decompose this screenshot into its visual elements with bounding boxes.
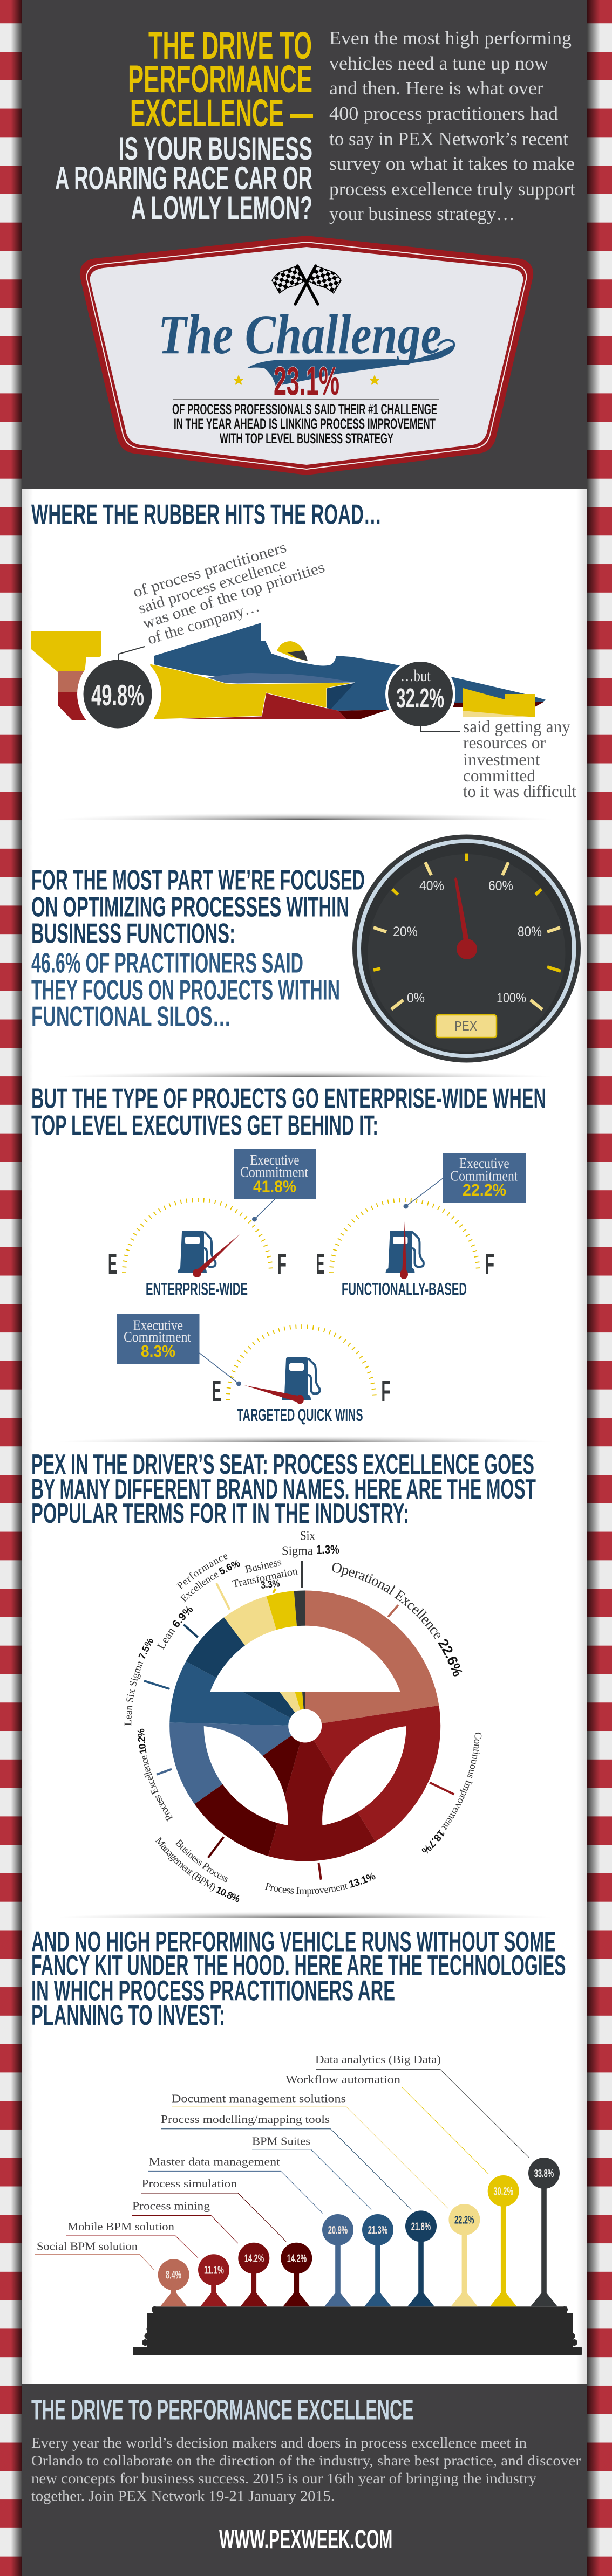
heading: projects go enterprise-wide	[31, 1083, 546, 1141]
helmet	[277, 641, 308, 661]
item: Process simulation 14.2%	[141, 2177, 312, 2306]
heading: no high performing vehicle	[31, 1926, 566, 2031]
item: Data analytics 33.8%: 33.8%	[534, 2168, 554, 2180]
item: BPM Suites 21.3%: 21.3%	[368, 2224, 387, 2237]
heading: focused on optimizing processes: ON OPTIMIZING PROCESSES WITHIN	[31, 892, 349, 923]
label: Six Sigma: Sigma	[282, 1544, 313, 1558]
label: Operational Excellence: Operational Excellence 22.6%	[332, 1563, 462, 1677]
heading: PEX in the driver's seat	[31, 1449, 536, 1529]
item: Process simulation 14.2%: Process simulation	[141, 2177, 237, 2190]
footer paragraph: together. Join PEX Network 19-21 January 2015.	[31, 2488, 335, 2504]
icon: right star	[369, 375, 380, 385]
label: Six Sigma	[282, 1529, 339, 1558]
title: PERFORMANCE	[128, 58, 312, 101]
item: Process modelling/mapping tools 21.8%	[161, 2113, 437, 2306]
callout: 8.3%: Executive	[133, 1317, 183, 1334]
challenge description: WITH TOP LEVEL BUSINESS STRATEGY	[220, 430, 393, 446]
text: 32.2% explanation: resources or	[463, 733, 546, 752]
challenge description: IN THE YEAR AHEAD IS LINKING PROCESS IMPROVEMENT	[174, 416, 436, 432]
gauge labels	[393, 878, 542, 1006]
item: Master data management 20.9%: 20.9%	[328, 2224, 348, 2237]
chart: technologies lollipop engine	[35, 2053, 582, 2355]
item: Mobile BPM solution 11.1%: Mobile BPM solution	[67, 2220, 175, 2233]
needle	[193, 1234, 240, 1277]
gauge needle	[454, 877, 477, 959]
label: Performance Excellence: Excellence 5.6%	[180, 1560, 240, 1603]
intro text: and then. Here is what over	[329, 78, 543, 99]
intro text: 400 process practitioners had	[329, 103, 559, 124]
item: Document management solutions 22.2%: Document management solutions	[172, 2092, 346, 2105]
chart: steering wheel pie	[124, 1529, 481, 1902]
challenge description: OF PROCESS PROFESSIONALS SAID THEIR #1 CHALLENGE	[172, 401, 437, 417]
side panel dark	[327, 683, 355, 709]
panel: The Challenge badge	[80, 236, 533, 475]
needle	[244, 1385, 304, 1404]
text: 32.2% explanation	[463, 717, 576, 801]
label: Business Process Management: Management (BPM) 10.8%	[155, 1837, 240, 1902]
icon: fuel pump	[385, 1231, 424, 1273]
item: BPM Suites 21.3%: BPM Suites	[252, 2134, 310, 2147]
chart: fuel gauge functionally-based: E	[316, 1248, 325, 1280]
intro text: Even the most high performing	[329, 28, 572, 49]
stat: 32.2% circle: 32.2%	[396, 683, 444, 713]
lower dark floor	[338, 710, 389, 719]
gauge labels: 20%	[393, 924, 418, 939]
label: Lean Six Sigma: Lean Six Sigma 7.5%	[124, 1638, 153, 1726]
title: A ROARING RACE CAR OR	[55, 160, 312, 196]
needle	[400, 1216, 408, 1279]
label: Business Transformation: Transformation	[232, 1565, 298, 1590]
item: Workflow automation 30.2%: Workflow automation	[285, 2073, 401, 2086]
text: rotated callout for 49.8%: was one of the top priorities	[140, 559, 327, 633]
chart: fuel gauge functionally-based	[316, 1153, 526, 1299]
item: BPM Suites 21.3%	[252, 2134, 393, 2306]
challenge description	[172, 399, 439, 446]
intro text	[329, 28, 575, 224]
callout: 41.8%: 41.8%	[253, 1177, 296, 1196]
chart: fuel gauge enterprise-wide: F	[277, 1248, 287, 1280]
intro text: survey on what it takes to make	[329, 153, 575, 174]
chart: fuel gauge targeted quick wins: F	[381, 1375, 391, 1407]
car body	[154, 623, 546, 711]
gauge labels: 60%	[488, 878, 513, 894]
title: IS YOUR BUSINESS	[119, 130, 312, 167]
callout: 8.3%	[117, 1314, 241, 1386]
panel: footer	[22, 2384, 587, 2576]
callout: 8.3%: Commitment	[124, 1329, 191, 1345]
side pod highlight	[207, 673, 355, 684]
item: Data analytics 33.8%	[315, 2053, 560, 2306]
callout: 41.8%	[234, 1149, 316, 1222]
label: Business Transformation: Business	[244, 1556, 283, 1576]
item: Workflow automation 30.2%: 30.2%	[493, 2185, 513, 2198]
front wing	[453, 688, 543, 717]
PEX plate: PEX	[454, 1019, 477, 1035]
text: 32.2% explanation: said getting any	[463, 717, 570, 736]
label: Process Excellence: Process Excellence 10.2%	[137, 1729, 173, 1822]
stat text: 46.6% of practitioners: 46.6% OF PRACTITIONERS SAID	[31, 948, 303, 979]
item: Process mining 14.2%	[132, 2200, 269, 2306]
label: TARGETED QUICK WINS	[237, 1405, 363, 1425]
intro text: process excellence truly support	[329, 178, 575, 200]
callout: 41.8%: Commitment	[240, 1164, 308, 1180]
item: Social BPM solution 8.4%	[35, 2240, 189, 2306]
icon: left star	[233, 375, 244, 385]
callout: 22.2%	[404, 1153, 526, 1209]
text: rotated callout for 49.8%: of the company…	[146, 597, 262, 648]
title: THE DRIVE TO	[148, 25, 312, 67]
label: Continuous Improvement: Continuous Improvement 18.7%	[422, 1732, 481, 1854]
stat: 32.2% circle: …but	[400, 666, 431, 685]
item: Document management solutions 22.2%: 22.2%	[454, 2214, 474, 2226]
intro text: to say in PEX Network’s recent	[329, 128, 568, 149]
gauge labels: 0%	[407, 991, 425, 1006]
callout: 22.2%: 22.2%	[463, 1180, 506, 1199]
label: Performance Excellence: Performance	[176, 1554, 228, 1590]
engine base	[133, 2306, 582, 2355]
label: Process Improvement: Process Improvement 13.1%	[264, 1872, 376, 1896]
text: 32.2% explanation: to it was difficult	[463, 781, 576, 801]
heading: focused on optimizing processes: FOR THE MOST PART WE’RE FOCUSED	[31, 865, 365, 896]
gauge labels: 100%	[497, 991, 526, 1006]
stat: 49.8% circle: 49.8%	[91, 678, 144, 712]
gauge labels: 80%	[518, 924, 542, 939]
stat: 49.8% circle	[77, 647, 161, 736]
panel: white content background	[22, 489, 587, 2384]
footer paragraph: Every year the world’s decision makers and doers in process excellence meet in	[31, 2435, 527, 2451]
text: rotated callout for 49.8%	[131, 539, 327, 648]
item: Process modelling/mapping tools 21.8%: 21.8%	[411, 2221, 431, 2233]
stat text: 46.6% of practitioners: FUNCTIONAL SILOS…	[31, 1001, 231, 1033]
item: Document management solutions 22.2%	[172, 2092, 480, 2306]
script heading: The Challenge	[158, 304, 454, 386]
footer URL: WWW.PEXWEEK.COM	[219, 2524, 392, 2554]
chart: fuel gauge enterprise-wide: E	[108, 1248, 117, 1280]
callout: 22.2%: Executive	[459, 1155, 509, 1171]
callout: 8.3%: 8.3%	[141, 1342, 175, 1361]
lower red body	[154, 693, 346, 719]
stat: 32.2% circle	[385, 659, 460, 731]
stat: 23.1%: 23.1%	[274, 359, 339, 403]
item: Social BPM solution 8.4%: 8.4%	[166, 2269, 181, 2282]
heading: focused on optimizing processes: BUSINESS FUNCTIONS:	[31, 918, 235, 950]
text: 32.2% explanation: committed	[463, 766, 535, 785]
PEX plate	[436, 1015, 497, 1038]
item: Mobile BPM solution 11.1%: 11.1%	[204, 2264, 224, 2277]
label: ENTERPRISE-WIDE	[146, 1280, 248, 1299]
label: Lean: Lean 6.9%	[157, 1606, 193, 1650]
stat text: 46.6% of practitioners	[31, 948, 340, 1033]
text: rotated callout for 49.8%: said process excellence	[137, 555, 288, 617]
gauge ticks	[373, 854, 561, 1009]
chart: fuel gauge enterprise-wide	[108, 1149, 316, 1299]
yellow side panel	[146, 664, 355, 719]
item: Process mining 14.2%: Process mining	[132, 2200, 210, 2213]
wheel cutouts	[204, 1626, 406, 1825]
callout: 41.8%: Executive	[250, 1152, 300, 1168]
item: Social BPM solution 8.4%: Social BPM solution	[37, 2240, 138, 2252]
text: 32.2% explanation: investment	[463, 750, 540, 769]
chart: speedometer	[352, 835, 581, 1062]
panel: dark header background	[22, 0, 587, 489]
item: Mobile BPM solution 11.1%	[66, 2220, 229, 2306]
rear wing	[31, 631, 101, 720]
label: Six Sigma: 1.3%	[316, 1543, 339, 1556]
gauge labels: 40%	[419, 878, 444, 894]
title: A LOWLY LEMON?	[131, 190, 312, 226]
item: Process modelling/mapping tools 21.8%: Process modelling/mapping tools	[161, 2113, 330, 2126]
intro text: your business strategy…	[329, 203, 515, 224]
title	[55, 25, 313, 226]
heading: projects go enterprise-wide: TOP LEVEL EXECUTIVES GET BEHIND IT:	[31, 1110, 378, 1141]
heading: where the rubber hits the road: WHERE THE RUBBER HITS THE ROAD…	[31, 499, 382, 531]
item: Master data management 20.9%: Master data management	[149, 2155, 280, 2168]
footer paragraph: new concepts for business success. 2015 is our 16th year of bringing the industry	[31, 2470, 537, 2486]
item: Data analytics 33.8%: Data analytics (Big Data)	[315, 2053, 441, 2066]
illustration: race car	[31, 623, 546, 736]
heading: no high performing vehicle: PLANNING TO INVEST:	[31, 2000, 225, 2031]
heading: focused on optimizing processes	[31, 865, 365, 1033]
item: Process simulation 14.2%: 14.2%	[287, 2252, 307, 2265]
label: Business Transformation: 3.3%	[260, 1578, 280, 1591]
item: Master data management 20.9%	[148, 2155, 353, 2306]
item: Process mining 14.2%: 14.2%	[244, 2252, 264, 2265]
icon: fuel pump	[178, 1231, 215, 1273]
text: rotated callout for 49.8%: of process practitioners	[131, 539, 288, 601]
footer paragraph	[31, 2435, 581, 2504]
intro text: vehicles need a tune up now	[329, 53, 549, 74]
icon: fuel pump	[282, 1357, 319, 1400]
segments	[169, 1590, 440, 1861]
chart: fuel gauge functionally-based: F	[485, 1248, 494, 1280]
leader ticks	[144, 1561, 454, 1880]
item: Workflow automation 30.2%	[285, 2073, 519, 2306]
stat text: 46.6% of practitioners: THEY FOCUS ON PROJECTS WITHIN	[31, 975, 340, 1006]
chart: fuel gauge targeted quick wins	[117, 1314, 391, 1425]
heading: no high performing vehicle: IN WHICH PROCESS PRACTITIONERS ARE	[31, 1975, 395, 2007]
label: Business Process Management: Business Process	[175, 1839, 228, 1882]
icon: crossed checkered flags	[272, 266, 341, 304]
script heading: The Challenge: The Challenge	[158, 304, 441, 366]
chart: fuel gauge targeted quick wins: E	[212, 1375, 221, 1407]
label: FUNCTIONALLY-BASED	[342, 1280, 467, 1299]
label: Six Sigma: Six	[300, 1529, 315, 1543]
title: EXCELLENCE —	[130, 92, 313, 135]
callout: 22.2%: Commitment	[450, 1168, 518, 1184]
footer paragraph: Orlando to collaborate on the direction of the industry, share best practice, and discover	[31, 2453, 581, 2469]
